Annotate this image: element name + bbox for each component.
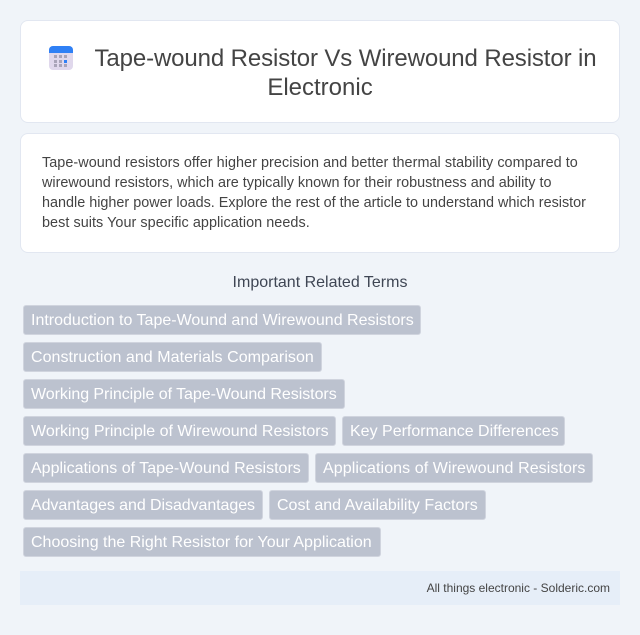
tag bbox=[23, 342, 322, 372]
tag: Cost and Availability Factors bbox=[277, 497, 478, 514]
tag bbox=[269, 490, 486, 520]
panel: title card bbox=[20, 20, 620, 123]
intro text bbox=[42, 155, 586, 231]
tag: Construction and Materials Comparison bbox=[31, 349, 314, 366]
tag: Advantages and Disadvantages bbox=[31, 497, 255, 514]
tag bbox=[315, 453, 593, 483]
title: Tape-wound Resistor Vs Wirewound Resistor in bbox=[94, 45, 597, 72]
tag: Key Performance Differences bbox=[350, 423, 559, 440]
tag: Introduction to Tape-Wound and Wirewound Resistors bbox=[31, 312, 414, 329]
tag bbox=[23, 379, 345, 409]
tag bbox=[23, 490, 263, 520]
icon: calendar bbox=[49, 46, 73, 70]
heading: related terms: Important Related Terms bbox=[233, 274, 407, 291]
tag: Applications of Tape-Wound Resistors bbox=[31, 460, 301, 477]
footer: All things electronic - Solderic.com bbox=[427, 581, 610, 595]
tag bbox=[342, 416, 565, 446]
tag bbox=[23, 453, 309, 483]
tag: Applications of Wirewound Resistors bbox=[323, 460, 585, 477]
intro text: wirewound resistors, which are typically known for their robustness and ability to bbox=[42, 175, 552, 191]
intro text: handle higher power loads. Explore the rest of the article to understand which resistor bbox=[42, 195, 586, 211]
tag bbox=[23, 527, 381, 557]
tag: Working Principle of Tape-Wound Resistors bbox=[31, 386, 337, 403]
tag bbox=[23, 416, 336, 446]
footer bbox=[20, 571, 620, 605]
intro text: Tape-wound resistors offer higher precision and better thermal stability compared to bbox=[42, 155, 578, 171]
tag: Choosing the Right Resistor for Your Application bbox=[31, 534, 372, 551]
panel: intro card bbox=[20, 133, 620, 253]
tag bbox=[23, 305, 421, 335]
title line 2: Electronic bbox=[267, 74, 373, 101]
intro text: best suits Your specific application needs. bbox=[42, 215, 310, 231]
tag: Working Principle of Wirewound Resistors bbox=[31, 423, 329, 440]
